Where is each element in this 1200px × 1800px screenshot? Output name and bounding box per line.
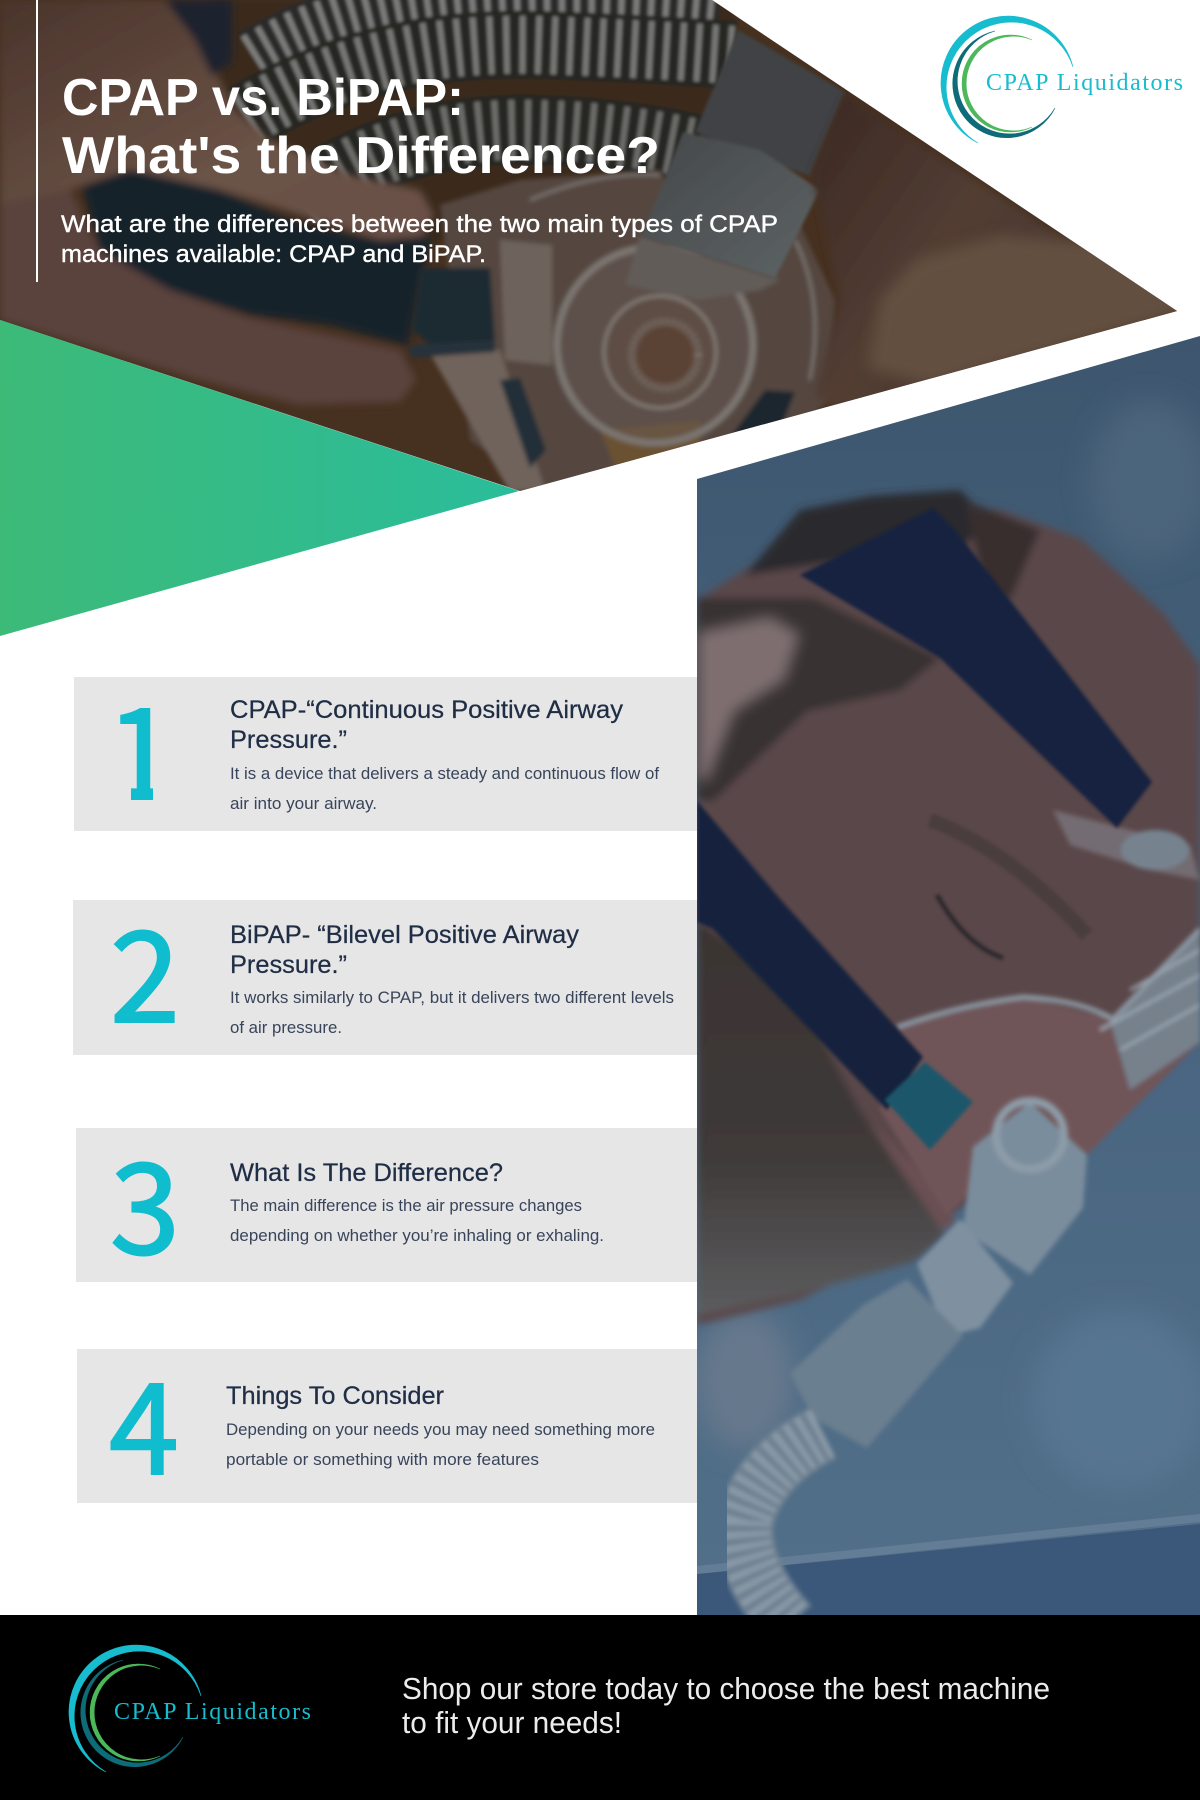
bedding highlights [695,400,1200,1490]
logo: footer: CPAP Liquidators [114,1699,311,1725]
footer call to action: Shop our store today to choose the best machine [402,1671,1050,1706]
card 2 text: of air pressure. [230,1018,342,1037]
bedding border strip [697,1524,1200,1615]
logo: top right: CPAP Liquidators [986,70,1183,96]
card 2 text: It works similarly to CPAP, but it delivers two different levels [230,988,674,1007]
head [697,490,1200,1325]
card 2 text: Pressure.” [230,951,347,979]
card 4 text [226,1382,655,1469]
card 3 [76,1109,697,1291]
right hand [812,95,1190,420]
card 1 number: 1 [106,654,176,836]
card 1 text: Pressure.” [230,726,347,754]
logo: footer [69,1645,311,1772]
card 3 text: The main difference is the air pressure changes [230,1196,582,1215]
card 4 number: 4 [109,1329,179,1511]
card 4 text: Depending on your needs you may need something more [226,1420,655,1439]
ear [697,616,800,780]
card 3 number: 3 [110,1109,180,1291]
card 2 number: 2 [110,877,180,1059]
footer call to action: to fit your needs! [402,1705,622,1740]
eyebrow and eye [930,820,1087,958]
mask body [410,170,835,492]
elbow and tubing [745,1101,1087,1625]
card 4 text: portable or something with more features [226,1450,539,1469]
card 4 text: Things To Consider [226,1382,444,1410]
card 1 text [230,696,659,813]
card 4 [77,1329,697,1511]
hero subtitle: machines available: CPAP and BiPAP. [61,241,486,268]
card 2 text: BiPAP- “Bilevel Positive Airway [230,921,580,949]
footer call to action [402,1671,1050,1740]
left hand [0,0,434,405]
card 2 [73,877,697,1059]
footer band [0,1615,1200,1800]
hair and stubble [697,598,940,801]
card 1 text: air into your airway. [230,794,377,813]
hero title: What's the Difference? [62,127,660,185]
card 3 text: What Is The Difference? [230,1159,503,1187]
green triangle [0,320,519,636]
white accent bar [36,0,38,282]
logo: top right [941,16,1183,143]
straps [697,508,1152,1150]
man photo: sleeping with CPAP mask [690,330,1200,1625]
card 1 text: It is a device that delivers a steady and continuous flow of [230,764,659,783]
tube cuffs [642,30,845,278]
card 3 text [230,1159,604,1245]
card 2 text [230,921,674,1037]
hero title [62,69,660,185]
hose coils [215,0,735,240]
card 3 text: depending on whether you’re inhaling or exhaling. [230,1226,604,1245]
hero subtitle: What are the differences between the two main types of CPAP [61,211,778,238]
hero subtitle [61,211,778,268]
hero title: CPAP vs. BiPAP: [62,69,464,127]
hero photo: hands holding CPAP mask [0,0,1200,500]
right palm highlight [868,235,1190,385]
mask frame [880,810,1200,1215]
card 1 [74,677,697,831]
card 1 text: CPAP-“Continuous Positive Airway [230,696,624,724]
